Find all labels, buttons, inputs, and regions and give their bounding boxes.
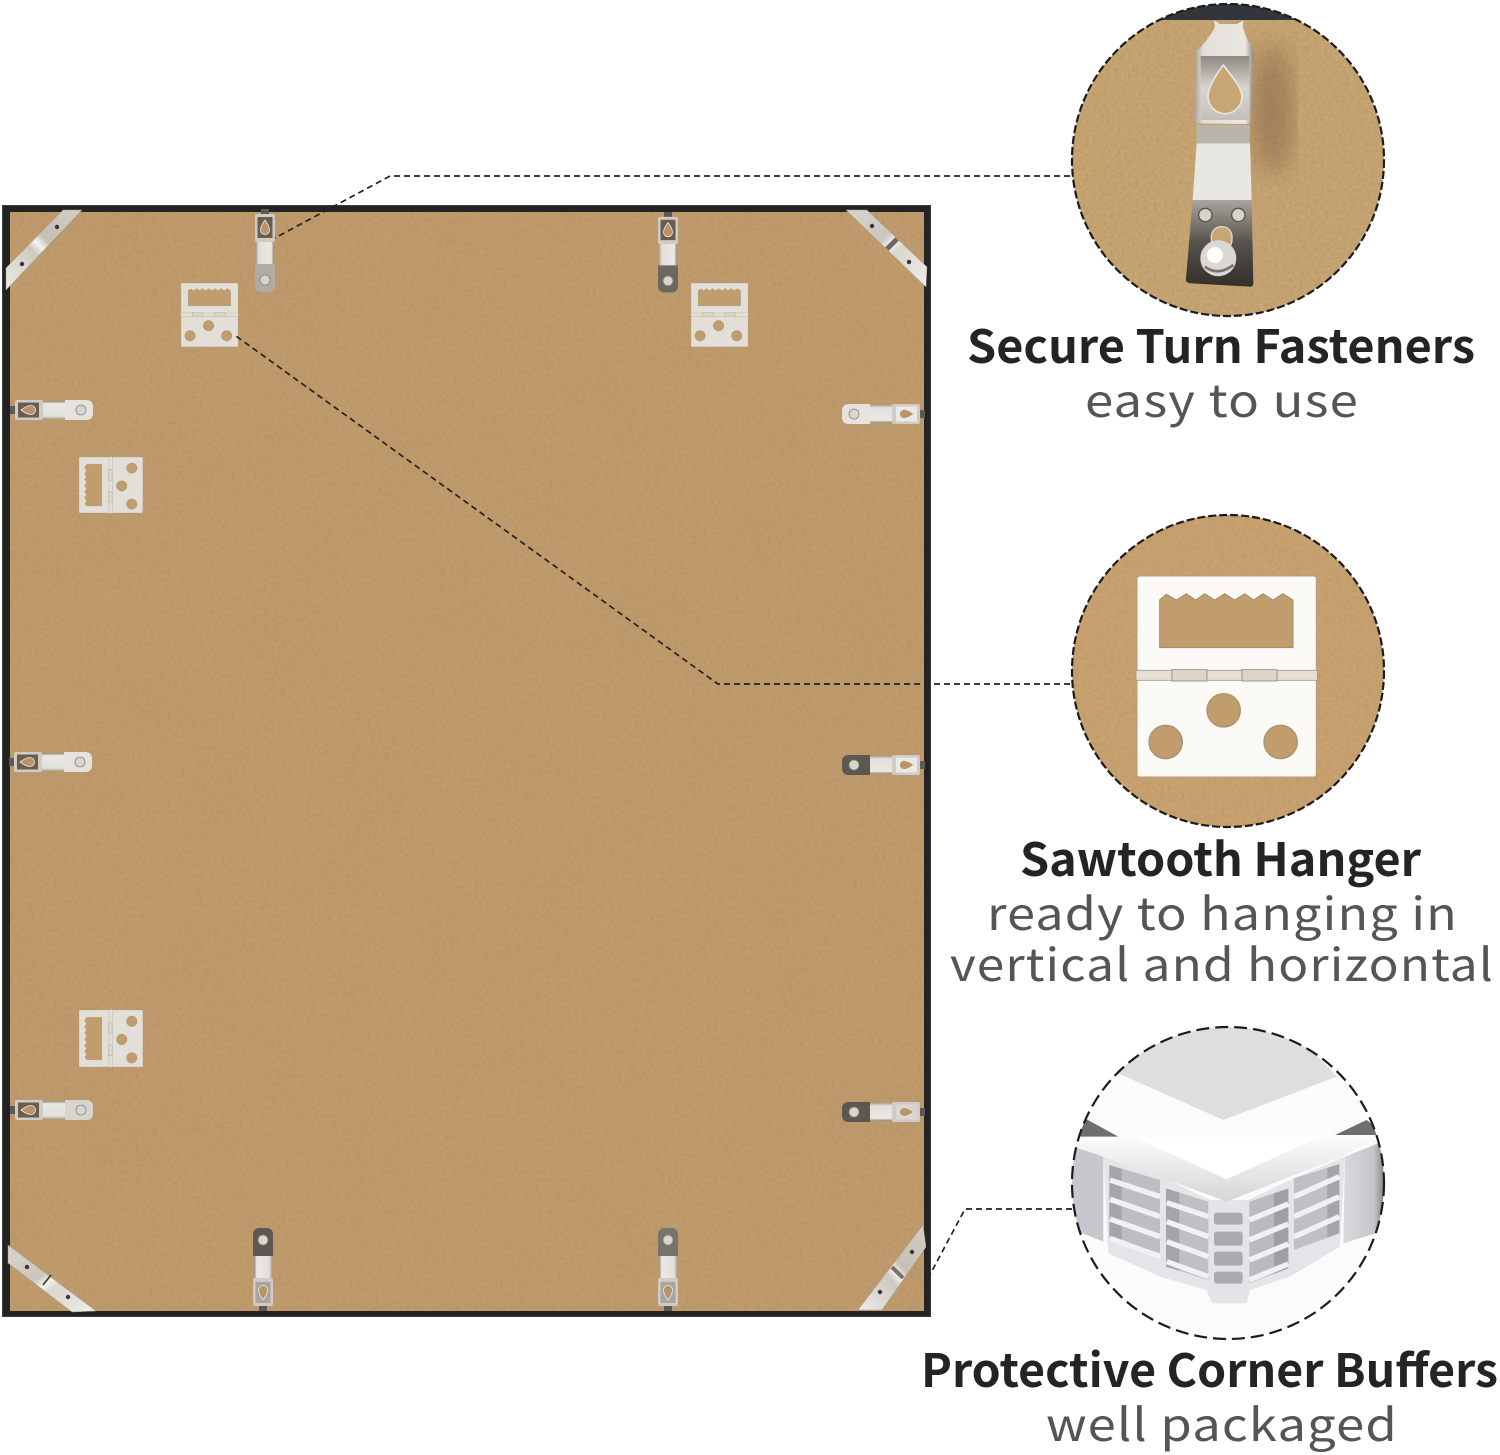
sawtooth hanger: top right — [691, 283, 748, 347]
turn fastener: top 1 — [255, 209, 275, 292]
sawtooth hanger: left lower — [79, 1010, 143, 1067]
leader line: fasteners — [275, 176, 1070, 238]
leader line: sawtooth hanger — [236, 336, 1070, 684]
heading: secure turn fasteners: Secure Turn Fasteners — [967, 311, 1475, 377]
corner bracket: bottom right — [858, 1225, 926, 1310]
corner bracket: top left — [6, 210, 82, 290]
leader line: corner buffers — [925, 1209, 1072, 1284]
frame border — [2, 205, 931, 1317]
corner bracket: top right — [846, 210, 927, 287]
sawtooth hanger: left upper — [79, 457, 143, 513]
turn fastener: left 1 — [10, 400, 93, 420]
turn fastener: top 2 — [658, 212, 678, 293]
turn fastener: right 2 — [842, 755, 925, 775]
turn fastener: bottom 1 — [253, 1228, 273, 1311]
panel: frame back — [2, 205, 931, 1317]
turn fastener: right 1 — [842, 404, 925, 424]
turn fastener: left 2 — [9, 752, 92, 772]
callout circle: sawtooth hanger close-up — [1070, 510, 1390, 830]
callout circle: corner buffer close-up — [1070, 1020, 1390, 1345]
subtext: well packaged: well packaged — [1046, 1389, 1398, 1454]
subtext: vertical and horizontal: vertical and horizontal — [950, 929, 1494, 994]
heading: protective corner buffers: Protective Corner Buffers — [921, 1335, 1498, 1401]
sawtooth hanger: top left — [181, 283, 238, 347]
heading: sawtooth hanger: Sawtooth Hanger — [1020, 824, 1422, 890]
subtext: easy to use: easy to use — [1085, 365, 1359, 430]
turn fastener: right 3 — [842, 1102, 925, 1122]
turn fastener: bottom 2 — [658, 1228, 678, 1311]
corner bracket: bottom left — [8, 1245, 96, 1312]
turn fastener: left 3 — [10, 1100, 93, 1120]
subtext: ready to hanging: ready to hanging in — [987, 878, 1458, 943]
kraft backing board — [10, 212, 924, 1311]
callout circle: turn fastener close-up — [1070, 0, 1390, 320]
